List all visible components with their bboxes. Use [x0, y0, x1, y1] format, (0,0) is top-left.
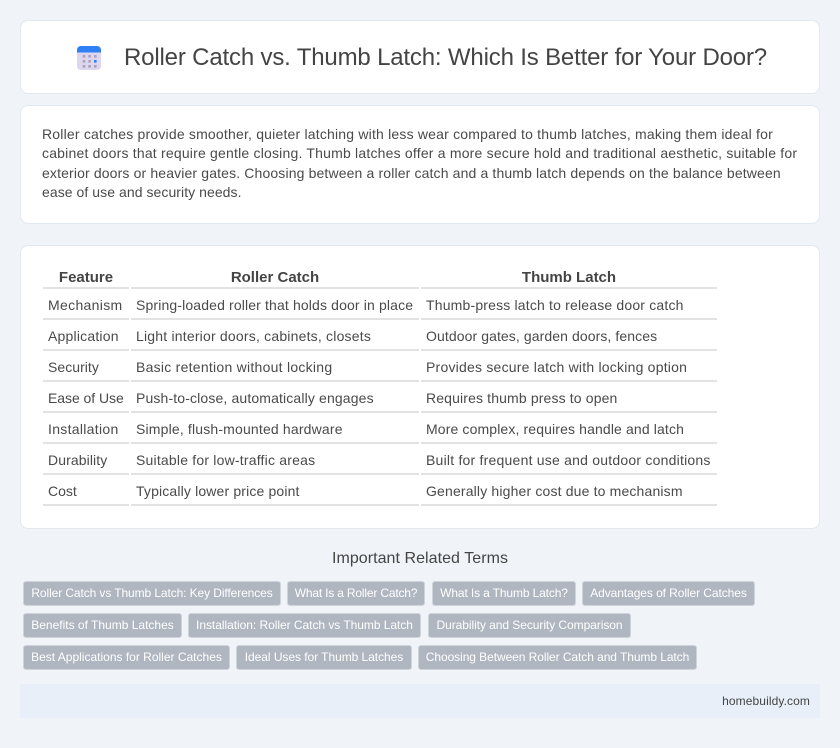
summary text	[42, 126, 797, 200]
row: Cost	[48, 483, 683, 499]
row: Cost: Generally higher cost due to mechanism	[426, 483, 683, 499]
row: Ease of Use: Push-to-close, automatically engages	[136, 390, 374, 406]
tag	[418, 645, 697, 670]
tag	[582, 581, 755, 606]
row: Security: Basic retention without locking	[136, 359, 332, 375]
tag: What Is a Roller Catch?	[295, 586, 417, 600]
row: Mechanism: Thumb-press latch to release door catch	[426, 297, 684, 313]
row: Installation: Installation	[48, 421, 119, 437]
tag: What Is a Thumb Latch?	[440, 586, 568, 600]
row: Mechanism: Mechanism	[48, 297, 123, 313]
tag	[23, 613, 182, 638]
tag: Benefits of Thumb Latches	[31, 618, 174, 632]
row: Durability: Suitable for low-traffic areas	[136, 452, 315, 468]
row: Security: Security	[48, 359, 99, 375]
summary text: Roller catches provide smoother, quieter latching with less wear compared to thumb latches, making them ideal for	[42, 126, 773, 142]
row: Security: Provides secure latch with locking option	[426, 359, 687, 375]
row: Application: Application	[48, 328, 119, 344]
table header: Thumb Latch: Thumb Latch	[522, 269, 616, 286]
row: Application: Outdoor gates, garden doors, fences	[426, 328, 657, 344]
panel: header	[20, 20, 820, 94]
summary text: ease of use and security needs.	[42, 184, 242, 200]
title: Roller Catch vs. Thumb Latch: Which Is Better for Your Door?	[124, 44, 767, 71]
tag	[236, 645, 412, 670]
tag: Durability and Security Comparison	[436, 618, 623, 632]
summary text: cabinet doors that require gentle closing. Thumb latches offer a more secure hold and traditional aesthetic, suitable for	[42, 145, 797, 161]
tags: related terms	[23, 581, 755, 670]
tag: Best Applications for Roller Catches	[31, 650, 222, 664]
panel: summary	[20, 105, 820, 224]
row: Security	[48, 359, 687, 375]
table header: Feature: Feature	[59, 269, 113, 286]
table header: Roller Catch: Roller Catch	[231, 269, 319, 286]
row: Cost: Typically lower price point	[136, 483, 300, 499]
row: Ease of Use: Ease of Use	[48, 390, 124, 406]
tag	[23, 645, 230, 670]
row: Cost: Cost	[48, 483, 77, 499]
row: Durability	[48, 452, 711, 468]
summary text: exterior doors or heavier gates. Choosing between a roller catch and a thumb latch depends on the balance between	[42, 165, 781, 181]
footer source: homebuildy.com	[722, 694, 810, 708]
row: Durability: Built for frequent use and outdoor conditions	[426, 452, 711, 468]
tag	[432, 581, 576, 606]
tag	[287, 581, 425, 606]
tag	[188, 613, 421, 638]
row: Application	[48, 328, 657, 344]
tag	[23, 581, 281, 606]
row: Application: Light interior doors, cabinets, closets	[136, 328, 371, 344]
row: Ease of Use	[48, 390, 617, 406]
panel: comparison table	[20, 245, 820, 529]
row: Installation	[48, 421, 684, 437]
footer	[20, 684, 820, 718]
tag: Choosing Between Roller Catch and Thumb Latch	[426, 650, 689, 664]
heading: related terms: Important Related Terms	[332, 550, 508, 567]
row: Installation: More complex, requires handle and latch	[426, 421, 684, 437]
tag: Installation: Roller Catch vs Thumb Latch	[196, 618, 413, 632]
row: Installation: Simple, flush-mounted hardware	[136, 421, 343, 437]
tag: Ideal Uses for Thumb Latches	[245, 650, 403, 664]
tag: Roller Catch vs Thumb Latch: Key Differences	[31, 586, 273, 600]
row: Durability: Durability	[48, 452, 107, 468]
tag: Advantages of Roller Catches	[590, 586, 747, 600]
icon: calendar	[77, 46, 101, 70]
row: Mechanism	[48, 297, 684, 313]
row: Ease of Use: Requires thumb press to open	[426, 390, 617, 406]
tag	[428, 613, 631, 638]
row: Mechanism: Spring-loaded roller that holds door in place	[136, 297, 413, 313]
